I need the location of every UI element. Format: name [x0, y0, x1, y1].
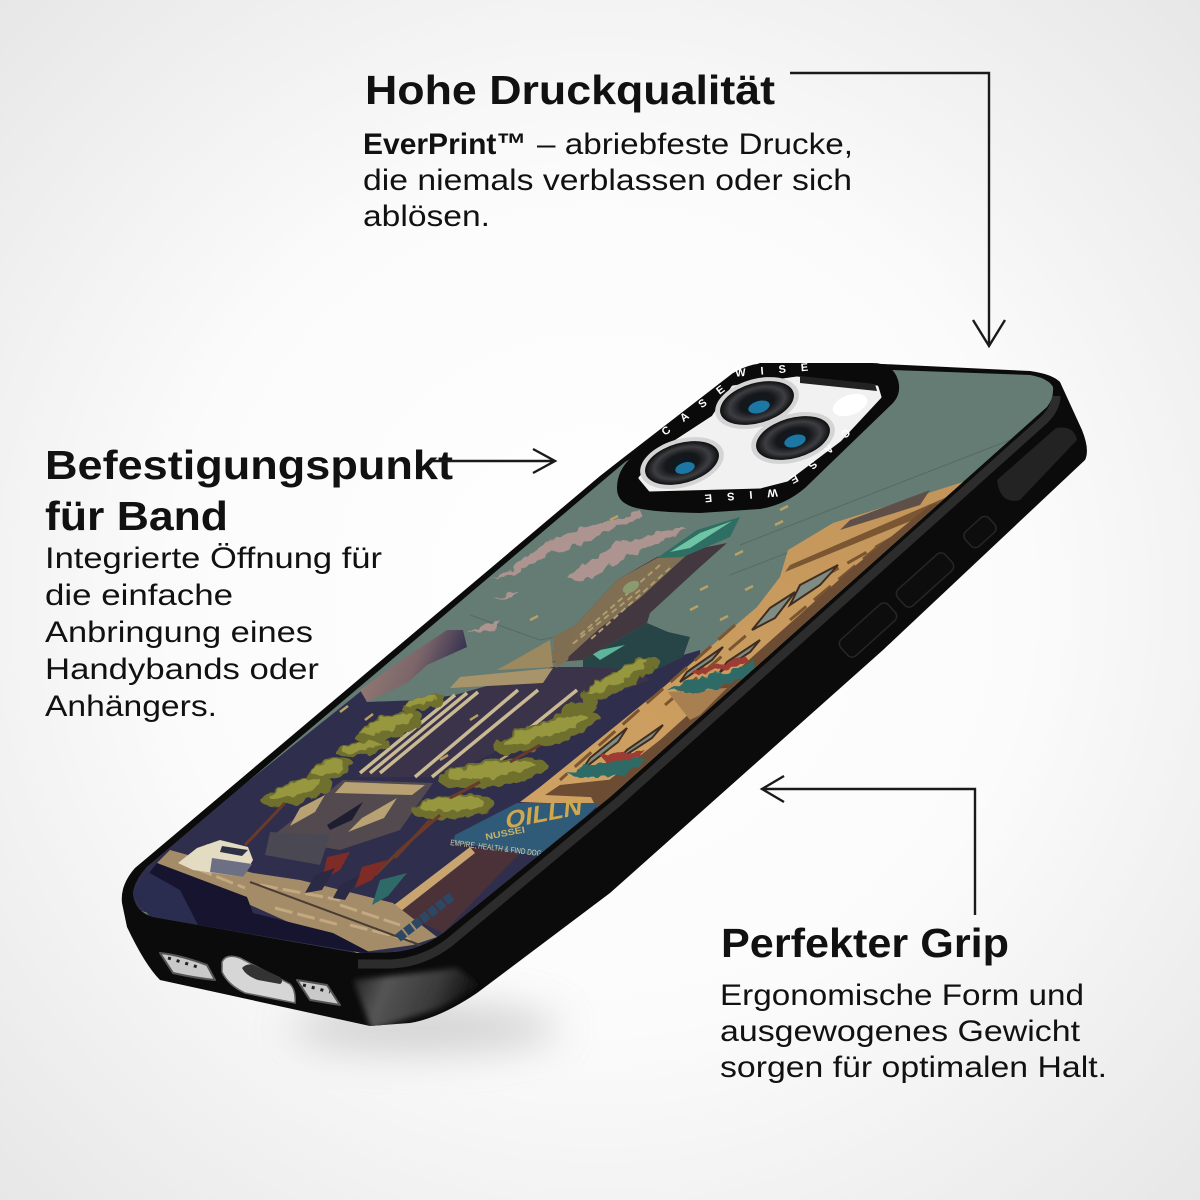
upper balcony greenery [667, 663, 757, 692]
sign sub lettering: NUSSEI [484, 825, 526, 842]
dome highlight [670, 521, 732, 552]
callout: print quality [363, 67, 853, 233]
ring lettering top: CASEWISE [662, 363, 808, 434]
corner highlight [353, 968, 480, 1030]
gold sparkles [170, 506, 788, 850]
arrow: strap attachment [430, 449, 555, 473]
lower balcony flowers [600, 750, 645, 762]
building cornice shadow [785, 498, 946, 572]
bump frame [617, 363, 899, 513]
street lower-left blue [133, 872, 198, 925]
upper balcony flowers [690, 656, 750, 676]
temple right dark mass [357, 667, 650, 777]
body text: Handybands oder [45, 653, 319, 686]
heading: Perfekter Grip [721, 920, 1009, 966]
dark teal buildings behind temple [583, 623, 690, 671]
building windows [582, 565, 838, 770]
right tan building [520, 480, 1000, 805]
foreground shadow [133, 863, 375, 955]
street light stripes [195, 868, 410, 940]
body text [720, 979, 1107, 1084]
clouds [467, 510, 683, 633]
phone case [122, 363, 1087, 1030]
temple pediment [497, 640, 553, 670]
arrow: print quality [790, 73, 1005, 346]
sky [133, 370, 1054, 953]
side button: volume up [894, 550, 956, 610]
entablature [450, 668, 553, 688]
car window [220, 846, 248, 856]
street [157, 850, 437, 953]
street dark line [250, 882, 420, 945]
lower balcony ledge [545, 780, 612, 798]
body text [363, 128, 853, 233]
storefront barrier [398, 896, 452, 938]
side rim bevel [358, 396, 1056, 964]
tower dome [657, 517, 740, 558]
case body [122, 363, 1087, 1026]
heading: für Band [45, 493, 228, 539]
temple stairs [265, 832, 330, 865]
building roof stripe [840, 490, 930, 530]
temple columns [360, 690, 577, 777]
side button: action [961, 514, 999, 550]
body text: die einfache [45, 579, 233, 612]
ring lettering bottom: CASEWISE [704, 430, 850, 502]
building stripes [559, 520, 920, 781]
clock face [622, 580, 640, 594]
port opening [242, 964, 282, 984]
lower balcony greenery [567, 758, 647, 778]
camera bump [617, 363, 900, 513]
temple base tan blocks [290, 782, 425, 832]
body text: Anbringung eines [45, 616, 313, 649]
body text: Anhängers. [45, 690, 217, 723]
body text: Integrierte Öffnung für [45, 542, 382, 575]
lens 1 [709, 368, 805, 438]
heading: Befestigungspunkt [45, 442, 453, 488]
teal roof accents [590, 645, 625, 660]
body text: Ergonomische Form und [720, 979, 1084, 1012]
temple base [270, 780, 433, 850]
heading [45, 442, 453, 539]
temple door [327, 802, 363, 830]
charging port [222, 956, 295, 1003]
side button: volume down [837, 600, 899, 660]
body text: EverPrint™ [363, 128, 526, 161]
lens 2 [745, 403, 841, 473]
sign strap line: EMPIRE, HEALTH & FIND DOG [450, 838, 542, 858]
car body [178, 840, 253, 877]
callout: strap attachment [45, 442, 453, 723]
tower detail lines [572, 564, 670, 644]
callout: perfect grip [720, 920, 1107, 1084]
under-balcony awning [668, 688, 727, 720]
sign lettering: OILLN [504, 793, 583, 835]
shop sign [453, 803, 600, 857]
body text: – abriebfeste Drucke, [537, 128, 853, 161]
flash [830, 389, 870, 421]
printed artwork [133, 370, 1054, 953]
body text: ausgewogenes Gewicht [720, 1015, 1081, 1048]
brown background building [360, 630, 467, 702]
car rear [210, 858, 252, 877]
clock tower lit side [552, 556, 686, 662]
body text: die niemals verblassen oder sich [363, 164, 852, 197]
building edge shade [590, 500, 960, 815]
storefront tan frame [390, 847, 475, 915]
speaker holes right [303, 985, 330, 992]
tree trunks [245, 745, 540, 875]
overhead wires [470, 440, 1010, 640]
car [178, 840, 253, 877]
inner dark strip [800, 376, 877, 391]
clock tower [543, 543, 727, 663]
body text: ablösen. [363, 200, 490, 233]
side button: silent switch [997, 428, 1077, 501]
pedestrians [305, 852, 407, 905]
camera glass [640, 378, 880, 490]
storefront [390, 847, 520, 933]
speaker holes left [168, 958, 201, 968]
body text: sorgen für optimalen Halt. [720, 1051, 1107, 1084]
lens 3 [634, 428, 730, 498]
navy lower ground [133, 650, 700, 953]
trees [258, 651, 664, 823]
arrow: perfect grip [762, 776, 975, 915]
body text [45, 542, 382, 723]
right speaker [297, 980, 340, 1005]
temple right spire [553, 625, 575, 668]
heading: Hohe Druckqualität [365, 67, 775, 113]
left speaker [160, 953, 215, 980]
phone shadow [290, 1004, 560, 1052]
